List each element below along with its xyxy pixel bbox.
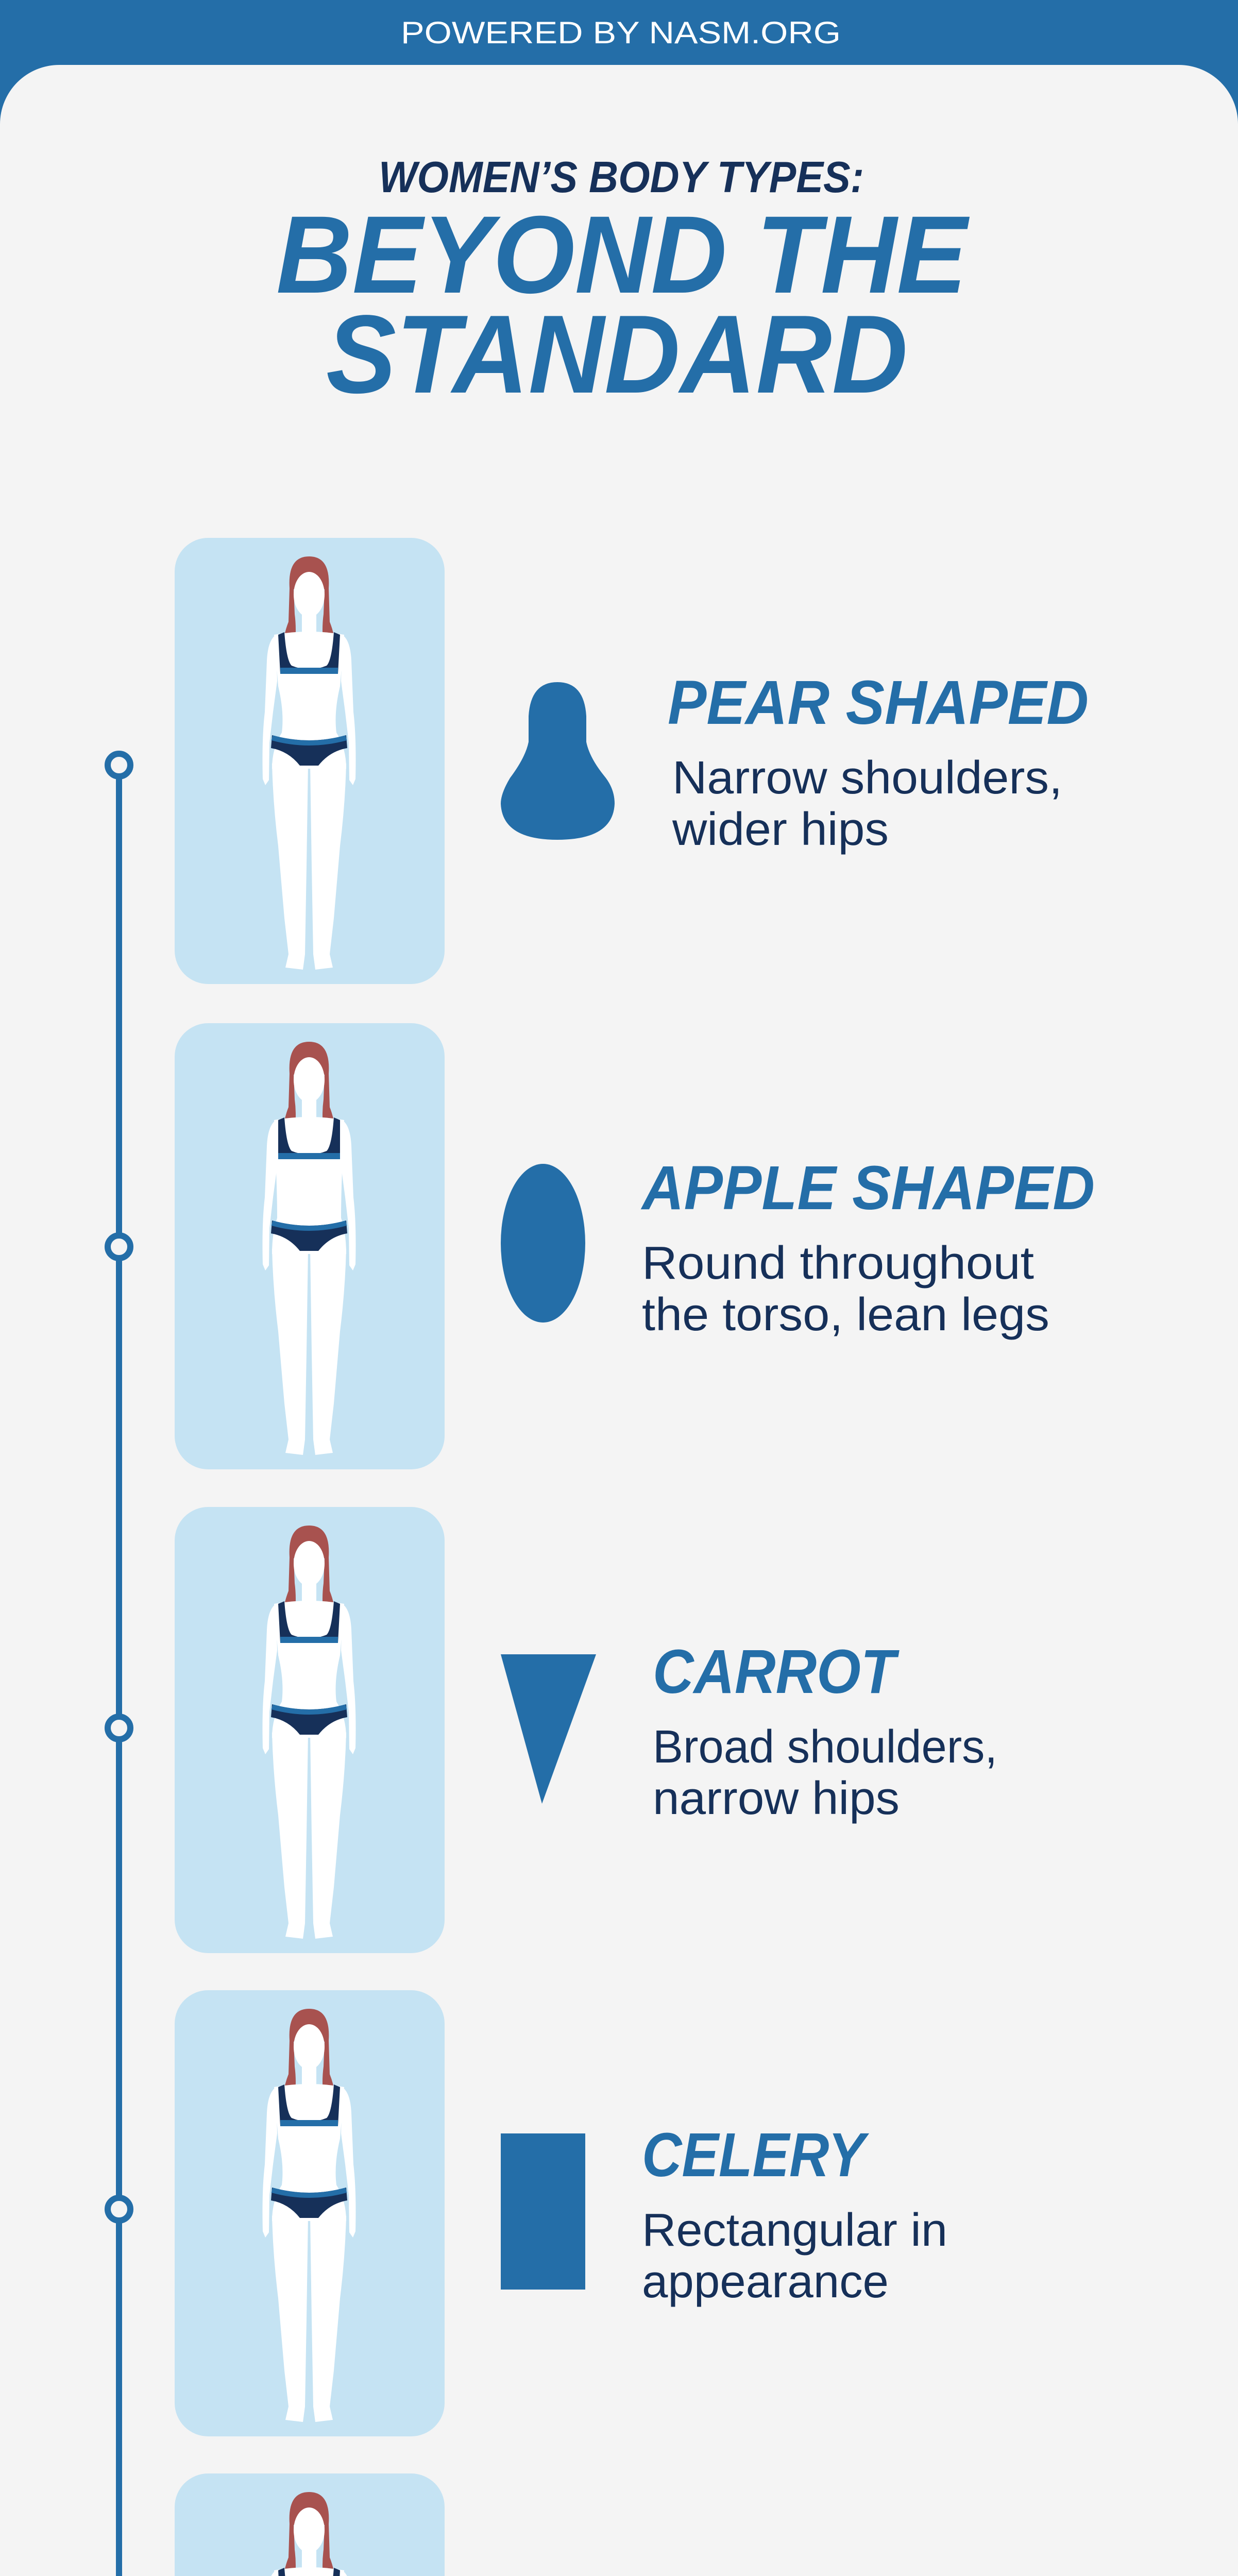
panel: hourglass bbox=[175, 2473, 1047, 2576]
description: the torso, lean legs bbox=[642, 1289, 1049, 1341]
description: wider hips bbox=[672, 804, 889, 855]
heading: PEAR SHAPED bbox=[668, 667, 1089, 737]
description: Round throughout bbox=[642, 1238, 1034, 1289]
card with figure bbox=[175, 538, 445, 984]
description bbox=[642, 1238, 1049, 1341]
heading: CARROT bbox=[653, 1636, 900, 1706]
icon: inverted triangle bbox=[501, 1654, 596, 1804]
heading: APPLE SHAPED bbox=[640, 1153, 1095, 1223]
description: Narrow shoulders, bbox=[672, 752, 1062, 804]
heading: CELERY bbox=[642, 2120, 869, 2190]
powered by text: POWERED BY NASM.ORG bbox=[401, 15, 841, 50]
card with figure bbox=[175, 1507, 445, 1953]
card with figure bbox=[175, 2473, 445, 2576]
card with figure bbox=[175, 1990, 445, 2436]
title: BEYOND THE bbox=[276, 193, 970, 316]
description bbox=[653, 1721, 997, 1824]
description: narrow hips bbox=[653, 1773, 900, 1824]
description: Broad shoulders, bbox=[653, 1721, 997, 1773]
panel: celery bbox=[175, 1990, 947, 2436]
panel: apple shaped bbox=[175, 1023, 1095, 1469]
title: STANDARD bbox=[326, 292, 908, 416]
description: Rectangular in bbox=[642, 2205, 947, 2256]
icon: rectangle bbox=[501, 2133, 585, 2290]
icon: oval bbox=[501, 1164, 585, 1323]
description: appearance bbox=[642, 2256, 889, 2308]
panel: carrot bbox=[175, 1507, 997, 1953]
icon: pear bbox=[501, 682, 615, 840]
description bbox=[672, 752, 1062, 855]
description bbox=[642, 2205, 947, 2308]
title bbox=[276, 153, 970, 416]
panel: pear shaped bbox=[175, 538, 1089, 984]
timeline bbox=[108, 754, 130, 2576]
card with figure bbox=[175, 1023, 445, 1469]
title: WOMEN’S BODY TYPES: bbox=[379, 153, 864, 202]
